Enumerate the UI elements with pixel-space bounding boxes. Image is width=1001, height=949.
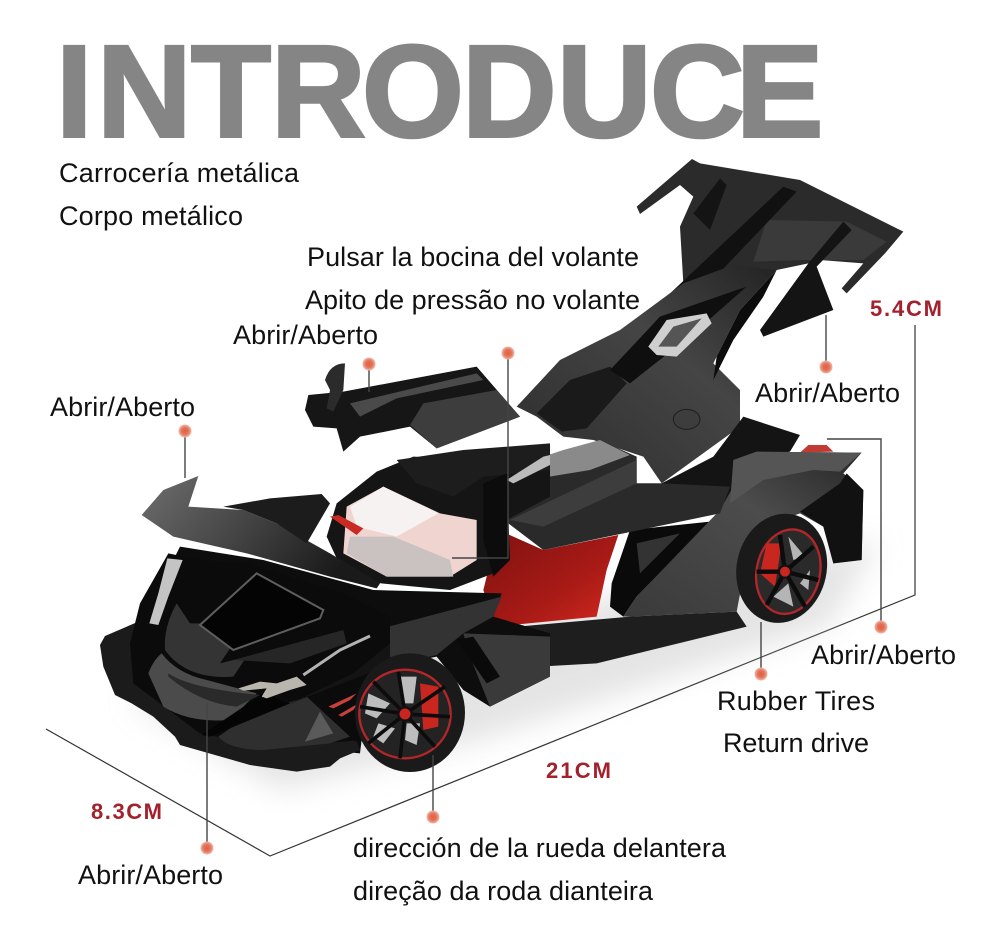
callout: rear deck: Abrir/Aberto — [811, 640, 956, 670]
callout: hood: Abrir/Aberto — [50, 392, 195, 422]
car: intake lip — [148, 653, 257, 721]
car: chrome strip — [303, 636, 370, 675]
car: raised left door — [305, 363, 520, 452]
callout: wing door: Abrir/Aberto — [755, 378, 900, 408]
callout: steering wheel horn — [452, 346, 514, 558]
car: raised door — [517, 265, 777, 483]
text: metal body: Corpo metálico — [59, 201, 243, 231]
car: red interior — [483, 530, 618, 627]
car: middle and front body — [142, 363, 550, 753]
car: front vent — [200, 573, 323, 650]
callout: rear deck — [811, 439, 956, 670]
car: nose — [100, 553, 390, 772]
car: front wheel — [355, 653, 465, 772]
text: metal body: Carrocería metálica — [59, 158, 300, 188]
car: rear half — [480, 159, 903, 670]
car: rear wheel — [726, 505, 837, 631]
callout: wing door — [755, 315, 900, 408]
callout: front opening: Abrir/Aberto — [78, 860, 223, 890]
car: sill — [480, 612, 747, 670]
dimension: height: 5.4CM — [870, 296, 942, 321]
text: steering wheel horn: Pulsar la bocina del volante — [307, 242, 639, 272]
callout: front opening — [78, 703, 223, 890]
car: side headlamp — [149, 558, 183, 625]
callout: left door — [233, 320, 378, 392]
callout: front wheel steering: dirección de la rueda delantera — [353, 833, 727, 863]
car: upper fender — [287, 643, 390, 705]
text: metal body — [59, 158, 300, 231]
car: lower vent panel — [218, 697, 350, 750]
car: raised hood — [142, 476, 380, 588]
title: INTRODUCE — [56, 18, 823, 164]
text: steering wheel horn: Apito de pressão no volante — [305, 285, 640, 315]
car — [100, 159, 903, 772]
car: headlight — [238, 677, 307, 698]
dimension: length: 21CM — [546, 758, 611, 783]
car: door lower panel — [508, 440, 730, 550]
callout: hood — [50, 392, 195, 478]
dimension: width: 8.3CM — [91, 799, 162, 824]
car: nose surface — [130, 553, 390, 747]
ground shadow — [130, 540, 880, 790]
callout: front wheel steering — [353, 755, 727, 906]
dimension lines — [46, 325, 915, 856]
callout: left door: Abrir/Aberto — [233, 320, 378, 350]
car: body behind hood — [150, 547, 550, 753]
callout: front wheel steering: direção da roda dianteira — [353, 876, 654, 906]
car: rear wing — [637, 159, 903, 337]
car: red fins — [328, 693, 358, 717]
callout: rubber tires — [717, 622, 875, 758]
car: cabin window — [327, 443, 550, 590]
car: rear deck — [637, 417, 800, 513]
car: rear body side — [623, 452, 863, 617]
car: front splitter — [100, 617, 360, 772]
callout: rubber tires: Return drive — [723, 728, 869, 758]
callout: rubber tires: Rubber Tires — [717, 686, 875, 716]
text: steering wheel horn — [305, 242, 640, 315]
car: side vent — [610, 522, 710, 617]
